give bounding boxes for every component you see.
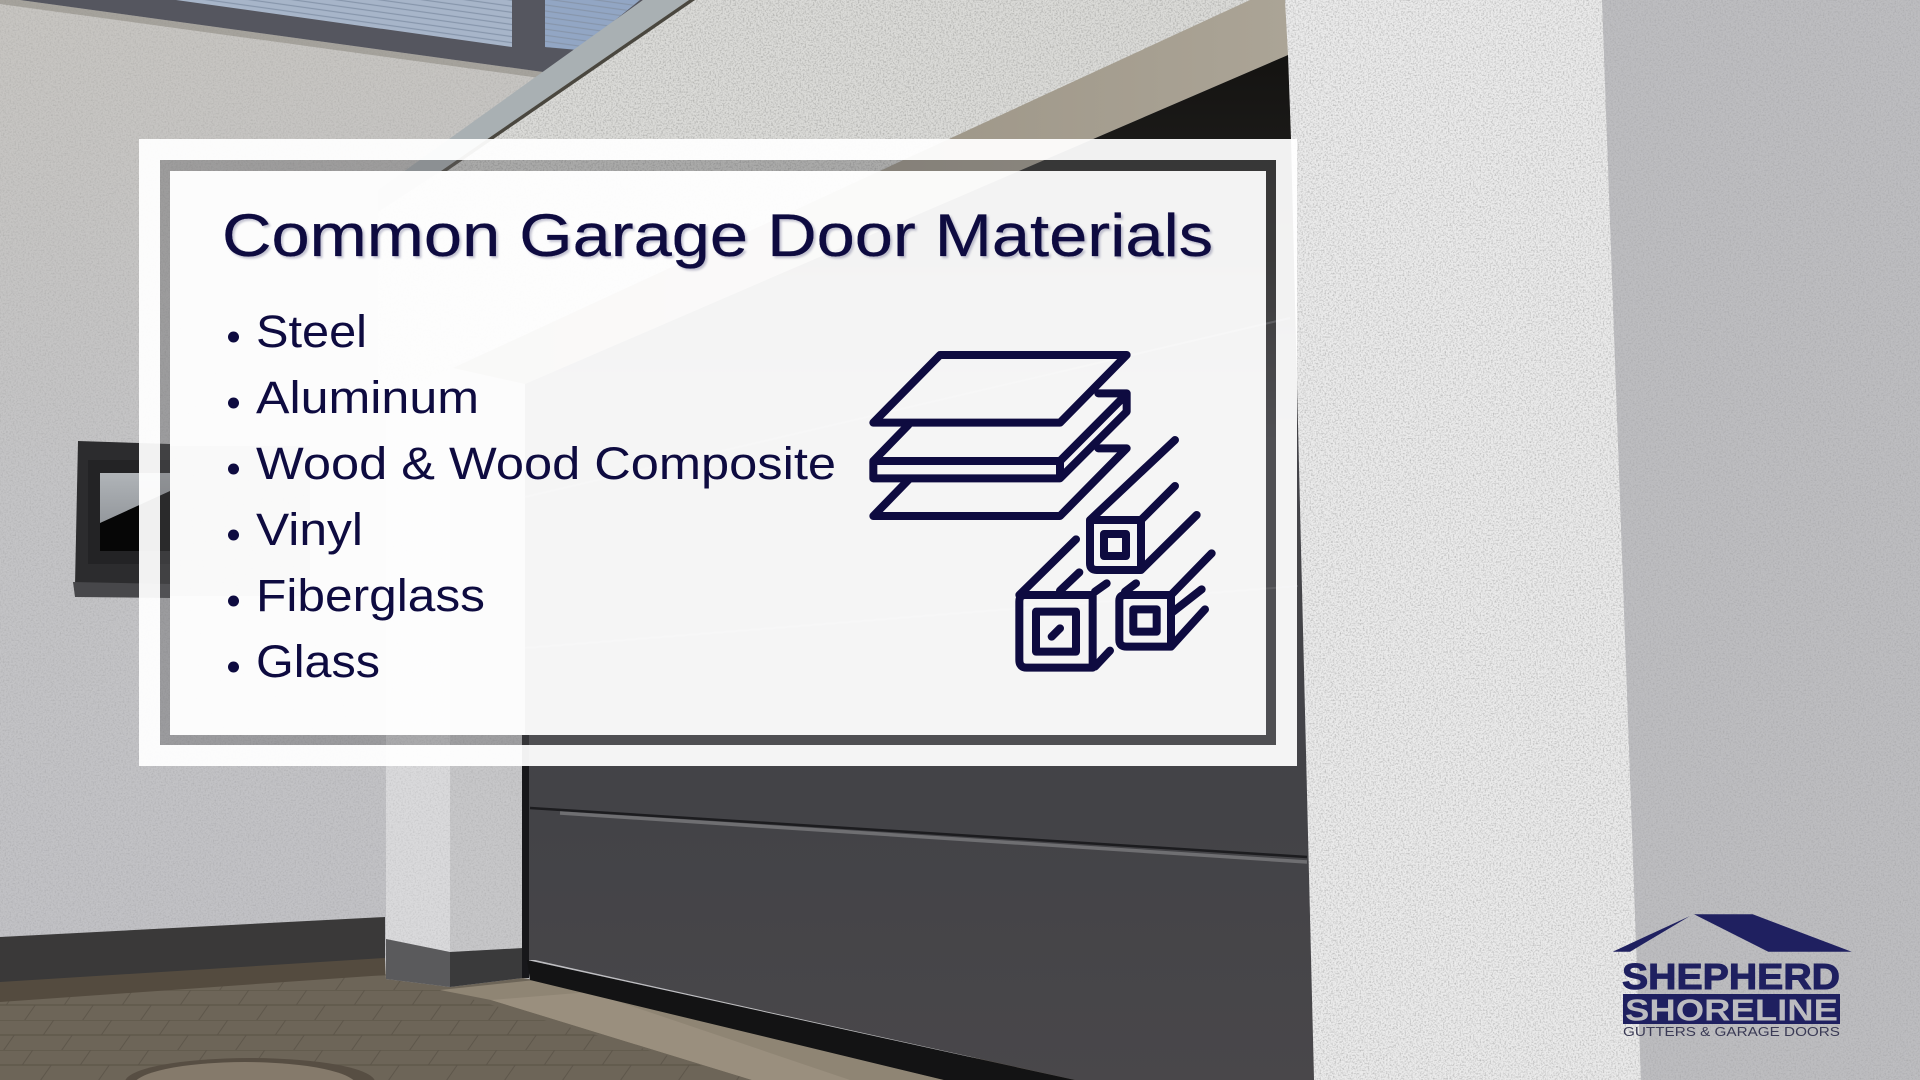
logo roof left — [1613, 916, 1690, 952]
soffit beige — [453, 0, 1288, 384]
roof flashing strip — [378, 0, 689, 212]
concrete slab — [440, 980, 944, 1080]
upper wall heavier texture — [448, 0, 1247, 171]
logo roof right — [1694, 914, 1852, 952]
door frame edge — [522, 735, 529, 978]
pillar left face — [386, 365, 455, 952]
bottom sheet — [873, 448, 1127, 516]
door seam middle — [525, 586, 1298, 648]
lower left beam — [1019, 539, 1110, 668]
right pane slats — [545, 0, 640, 50]
window pane right — [545, 0, 640, 50]
pillar plinth right — [450, 948, 523, 987]
logo wordmark shoreline: SHORELINE — [1625, 992, 1838, 1028]
flashing shadow — [441, 0, 695, 171]
pillar right face — [450, 340, 525, 952]
upper beam — [1090, 440, 1197, 570]
logo band — [1623, 994, 1840, 1024]
panel outer frame — [139, 139, 1297, 766]
door seam lower dark — [530, 808, 1307, 857]
cobble joints — [0, 970, 752, 1080]
logo wordmark shepherd: SHEPHERD — [1622, 956, 1840, 997]
icon: stacked sheets and beams — [873, 355, 1212, 668]
item: aluminum: Aluminum — [256, 372, 479, 423]
door seam upper — [525, 318, 1290, 497]
bullet list — [228, 306, 836, 687]
small window inner frame — [88, 460, 170, 564]
upper lit wall above the door — [378, 0, 1260, 400]
lower right beam — [1119, 553, 1212, 647]
small window glass reflection — [100, 491, 170, 551]
panel gray band — [160, 160, 1276, 745]
lit wall heavier texture — [1270, 0, 1650, 1080]
small window frame — [75, 441, 170, 585]
window pane with blinds — [176, 0, 512, 47]
moss strip along baseboard — [0, 956, 385, 1002]
small window sill — [73, 582, 170, 598]
item: wood: Wood & Wood Composite — [256, 438, 836, 489]
left pane slats — [176, 0, 512, 47]
garage door — [525, 55, 1314, 1080]
door bottom seal — [527, 960, 1075, 1080]
upper window frame — [20, 0, 643, 72]
door seam lower light — [560, 813, 1307, 862]
shadow under upper window — [0, 0, 543, 78]
item: steel: Steel — [256, 306, 367, 357]
information panel — [139, 139, 1297, 766]
small window glass — [100, 473, 170, 551]
pillar plinth left — [386, 939, 450, 987]
lighter concrete slab — [491, 992, 850, 1080]
logo tagline: GUTTERS & GARAGE DOORS — [1623, 1025, 1840, 1039]
shaded wall at right — [1602, 0, 1920, 1080]
panel inner card — [170, 171, 1266, 735]
baseboard — [0, 917, 385, 982]
title: Common Garage Door Materials — [222, 202, 1213, 269]
item: glass: Glass — [256, 636, 380, 687]
lit wall right of door — [1280, 0, 1641, 1080]
faint window ghost — [170, 446, 310, 596]
top sheet — [873, 355, 1127, 423]
item: fiberglass: Fiberglass — [256, 570, 485, 621]
middle sheet — [873, 393, 1127, 478]
item: vinyl: Vinyl — [256, 504, 363, 555]
ground cobbles — [0, 960, 1100, 1080]
manhole cover — [125, 1058, 375, 1080]
logo: Shepherd Shoreline — [1613, 914, 1852, 1039]
